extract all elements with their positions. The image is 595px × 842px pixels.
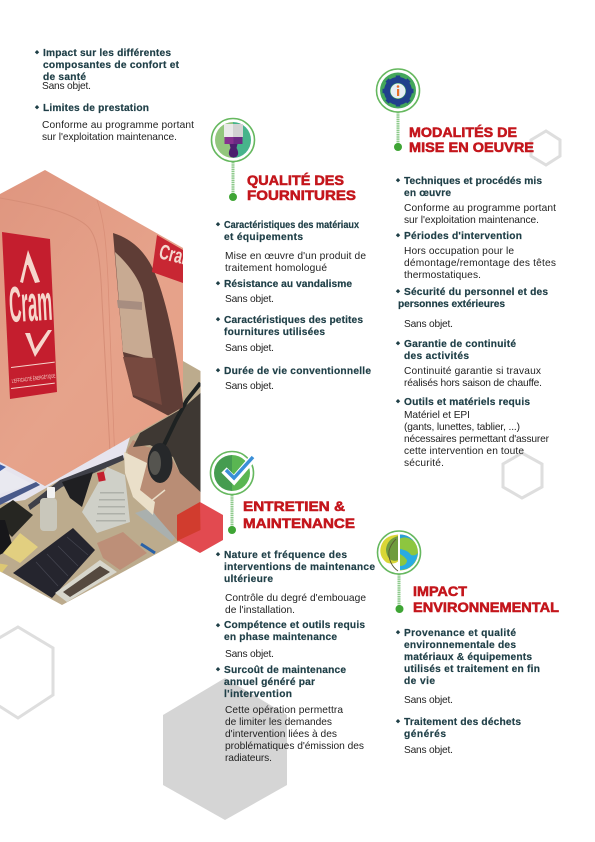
panel: modalités de mise en oeuvre [396, 176, 556, 469]
panel: modalités de mise en oeuvre: sur l'exploitation maintenance. [404, 215, 539, 226]
panel: modalités de mise en oeuvre: Sans objet. [404, 319, 453, 330]
panel: impact environnemental: matériaux & équipements [404, 652, 532, 663]
panel: modalités de mise en oeuvre: Sécurité du personnel et des [404, 287, 548, 298]
neck and face skin [127, 440, 200, 540]
background hexagon: top right outline [531, 131, 560, 165]
Cram logo [8, 250, 56, 389]
panel: modalités de mise en oeuvre: personnes extérieures [398, 299, 505, 310]
panel: qualité des fournitures: et équipements [224, 232, 303, 243]
panel: qualité des fournitures: traitement homologué [225, 263, 327, 274]
panel: entretien et maintenance: problématiques d'émission des [225, 741, 364, 752]
panel: modalités de mise en oeuvre: démontage/remontage des têtes [404, 258, 556, 269]
panel: impact environnemental: environnementale des [404, 640, 516, 651]
panel: qualité des fournitures [216, 220, 371, 392]
heading: entretien et maintenance: MAINTENANCE [243, 515, 355, 531]
panel: modalités de mise en oeuvre: nécessaires permettant d'assurer [404, 434, 550, 445]
panel: modalités de mise en oeuvre: Matériel et EPI [404, 410, 470, 421]
text block: confort et santé: Impact sur les différentes [43, 48, 171, 59]
Cram logo: Cram [8, 275, 54, 334]
panel: modalités de mise en oeuvre: Outils et matériels requis [404, 397, 530, 408]
panel: entretien et maintenance: Contrôle du degré d'embouage [225, 593, 366, 604]
background hexagon: mid right outline [503, 453, 542, 498]
text block: limites de prestation: Limites de prestation [43, 103, 149, 114]
background hexagon: left outline [0, 627, 53, 718]
panel: impact environnemental: de vie [404, 676, 435, 687]
panel: modalités de mise en oeuvre: Conforme au programme portant [404, 203, 556, 214]
panel: qualité des fournitures: Caractéristiques des matériaux [224, 220, 359, 231]
panel: impact environnemental: Traitement des déchets [404, 717, 521, 728]
background hexagon: large grey [163, 678, 287, 820]
panel: qualité des fournitures: Sans objet. [225, 343, 274, 354]
photo: Cram van [0, 165, 197, 490]
van window [113, 233, 183, 420]
panel: impact environnemental: Sans objet. [404, 695, 453, 706]
heading: qualité des fournitures [247, 172, 356, 203]
panel: entretien et maintenance: Nature et fréquence des [224, 550, 347, 561]
text block: limites de prestation [35, 103, 194, 143]
panel: entretien et maintenance: ultérieure [224, 574, 273, 585]
panel: entretien et maintenance: d'intervention liées à des [225, 729, 337, 740]
heading: impact environnemental: IMPACT [413, 583, 467, 599]
panel: impact environnemental [396, 628, 540, 756]
Cram logo: L'EFFICACITÉ ÉNERGÉTIQUE [11, 373, 56, 385]
panel: impact environnemental: générés [404, 729, 446, 740]
panel: entretien et maintenance: annuel généré par [224, 677, 315, 688]
panel: entretien et maintenance: radiateurs. [225, 753, 272, 764]
text block: confort et santé: de santé [43, 72, 86, 83]
text block: limites de prestation: sur l'exploitation maintenance. [42, 132, 177, 143]
panel: modalités de mise en oeuvre: thermostatiques. [404, 270, 481, 281]
photo: technician at desk [0, 361, 200, 605]
panel: entretien et maintenance: Surcoût de maintenance [224, 665, 346, 676]
panel: qualité des fournitures: fournitures utilisées [224, 327, 325, 338]
text block: confort et santé [35, 48, 180, 92]
panel: qualité des fournitures: Résistance au vandalisme [224, 279, 352, 290]
text block: confort et santé: Sans objet. [42, 81, 91, 92]
heading: modalités de mise en oeuvre: MODALITÉS DE [409, 124, 517, 140]
panel: entretien et maintenance: Cette opération permettra [225, 705, 343, 716]
heading: entretien et maintenance [243, 498, 355, 531]
accent overlap on photo [177, 502, 200, 541]
icon: gear [376, 69, 420, 151]
panel: modalités de mise en oeuvre: réalisés hors saison de chauffe. [404, 378, 542, 389]
panel: modalités de mise en oeuvre: cette intervention en toute [404, 446, 524, 457]
panel: modalités de mise en oeuvre: des activités [404, 351, 469, 362]
heading: modalités de mise en oeuvre [409, 124, 534, 155]
panel: entretien et maintenance: en phase maintenance [224, 632, 337, 643]
panel: modalités de mise en oeuvre: en œuvre [404, 188, 451, 199]
heading: impact environnemental: ENVIRONNEMENTAL [413, 599, 559, 615]
accent: red hexagon [177, 502, 223, 553]
panel: modalités de mise en oeuvre: (gants, lunettes, tablier, ...) [404, 422, 520, 433]
heading: entretien et maintenance: ENTRETIEN & [243, 498, 345, 514]
photo: Cram van: Cram [157, 240, 197, 271]
panel: qualité des fournitures: Durée de vie conventionnelle [224, 366, 371, 377]
panel: qualité des fournitures: Sans objet. [225, 381, 274, 392]
red Cram plate [2, 232, 57, 399]
panel: modalités de mise en oeuvre: Hors occupation pour le [404, 246, 514, 257]
panel: entretien et maintenance: interventions de maintenance [224, 562, 375, 573]
panel: entretien et maintenance: Sans objet. [225, 649, 274, 660]
panel: entretien et maintenance: Compétence et outils requis [224, 620, 365, 631]
icon: check mark [210, 452, 254, 534]
panel: impact environnemental: Provenance et qualité [404, 628, 516, 639]
panel: modalités de mise en oeuvre: Périodes d'intervention [404, 231, 522, 242]
panel: impact environnemental: Sans objet. [404, 745, 453, 756]
panel: qualité des fournitures: Caractéristiques des petites [224, 315, 363, 326]
icon: paint brush [212, 118, 254, 201]
panel: qualité des fournitures: Mise en œuvre d'un produit de [225, 251, 366, 262]
panel: qualité des fournitures: Sans objet. [225, 294, 274, 305]
van side plate [152, 235, 183, 283]
text block: confort et santé: composantes de confort et [43, 60, 180, 71]
heading: modalités de mise en oeuvre: MISE EN OEUVRE [409, 139, 534, 155]
panel: entretien et maintenance: de limiter les demandes [225, 717, 332, 728]
icon: leaf and globe [378, 531, 420, 613]
panel: impact environnemental: utilisés et traitement en fin [404, 664, 540, 675]
heading: qualité des fournitures: FOURNITURES [247, 187, 356, 203]
panel: entretien et maintenance [216, 550, 375, 764]
panel: modalités de mise en oeuvre: Techniques et procédés mis [404, 176, 542, 187]
heading: qualité des fournitures: QUALITÉ DES [247, 172, 344, 188]
panel: modalités de mise en oeuvre: sécurité. [404, 458, 444, 469]
text block: limites de prestation: Conforme au programme portant [42, 120, 194, 131]
panel: modalités de mise en oeuvre: Continuité garantie si travaux [404, 366, 541, 377]
heading: impact environnemental [413, 583, 559, 615]
panel: entretien et maintenance: l'intervention [224, 689, 292, 700]
panel: modalités de mise en oeuvre: Garantie de continuité [404, 339, 516, 350]
panel: entretien et maintenance: de l'installation. [225, 605, 295, 616]
